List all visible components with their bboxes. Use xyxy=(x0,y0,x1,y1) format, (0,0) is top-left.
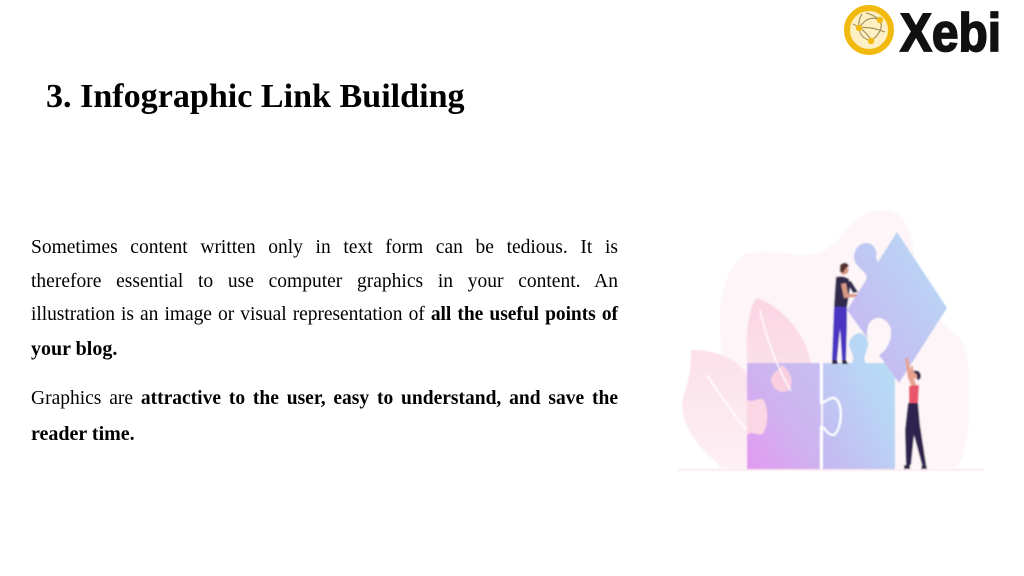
paragraph 1: illustration is an image or visual representation of all the useful points of xyxy=(31,304,618,325)
top xyxy=(909,385,919,403)
puzzle seam xyxy=(821,363,841,469)
paragraph 1: Sometimes content written only in text form can be tedious. It is xyxy=(31,237,618,258)
paragraph 1: your blog. xyxy=(31,338,117,360)
legs xyxy=(905,403,926,465)
logo: Xebi xyxy=(844,3,1001,63)
puzzle piece: top notch showing leaf xyxy=(771,365,792,392)
puzzle piece: left block xyxy=(747,363,821,469)
text block: body copy xyxy=(31,237,618,445)
paragraph 1: therefore essential to use computer graphics in your content. An xyxy=(31,271,618,292)
arms xyxy=(841,283,857,298)
leaf: back xyxy=(747,298,811,400)
paragraph 1 xyxy=(31,237,618,360)
title: 3. Infographic Link Building xyxy=(46,78,465,115)
paragraph 2 xyxy=(31,388,618,445)
leaf: front left xyxy=(682,350,750,468)
arms raised xyxy=(905,358,917,390)
wordmark: Xebi: Xebi xyxy=(900,3,1001,63)
head and hair xyxy=(912,371,920,379)
torso xyxy=(834,276,850,307)
background blob xyxy=(715,210,969,468)
puzzle piece: right block xyxy=(823,333,895,469)
paragraph 2: reader time. xyxy=(31,423,135,445)
shoes xyxy=(832,360,848,364)
figure: man xyxy=(832,263,858,364)
figure: woman xyxy=(904,358,927,469)
leaf vein xyxy=(760,310,791,391)
ground line xyxy=(678,469,984,470)
legs xyxy=(832,307,847,360)
puzzle piece: floating diamond xyxy=(847,232,947,383)
puzzle piece: side notch showing leaf xyxy=(747,399,767,435)
shoes xyxy=(904,464,927,469)
hair and head xyxy=(839,265,849,275)
icon: yellow network globe xyxy=(847,8,891,52)
paragraph 2: Graphics are attractive to the user, easy to understand, and save the xyxy=(31,388,618,409)
